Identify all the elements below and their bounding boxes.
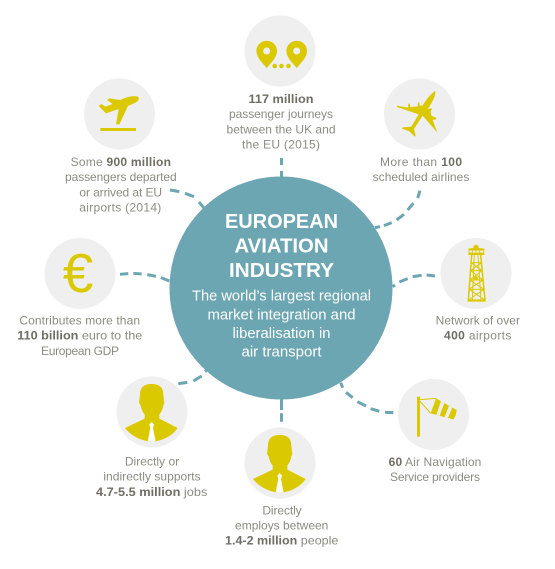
- connector: indirect jobs: [178, 369, 207, 384]
- label: Some 900 million: [71, 155, 171, 169]
- label: [17, 313, 143, 358]
- hub heading: INDUSTRY: [229, 259, 334, 282]
- label: [225, 503, 339, 547]
- connector: direct employment: [280, 398, 283, 422]
- label: 110 billion euro to the: [17, 328, 143, 342]
- hub heading: AVIATION: [234, 234, 328, 258]
- panel: air navigation: [389, 379, 481, 484]
- label: Contributes more than: [19, 313, 140, 327]
- hub description: liberalisation in: [232, 325, 330, 342]
- label: Network of over: [436, 313, 520, 327]
- label: airports (2014): [79, 201, 161, 215]
- hub heading: EUROPEAN: [225, 210, 338, 233]
- label: [389, 455, 481, 484]
- central hub circle: [170, 176, 392, 400]
- connector: GDP: [120, 273, 169, 281]
- label: Directly: [262, 503, 302, 517]
- label: [373, 155, 469, 184]
- label: [65, 155, 177, 215]
- icon: map pins: [256, 41, 307, 68]
- panel: passenger journeys: [226, 16, 336, 152]
- hub heading: [225, 210, 338, 282]
- hub description: [192, 288, 371, 361]
- label: 4.7-5.5 million jobs: [96, 485, 207, 499]
- connector: top: [280, 158, 283, 178]
- connector: air navigation: [341, 383, 393, 413]
- icon: control tower: [468, 245, 486, 302]
- label: passengers departed: [65, 170, 177, 184]
- panel: passengers: [65, 78, 177, 215]
- icon: person: [253, 435, 306, 492]
- connector: airlines: [375, 191, 420, 228]
- label: [226, 92, 336, 152]
- panel: direct employment: [225, 428, 339, 547]
- panel: GDP: [17, 238, 143, 358]
- label: [96, 455, 207, 499]
- connector: airports: [393, 275, 435, 287]
- label: More than 100: [380, 155, 462, 169]
- label: the EU (2015): [242, 138, 320, 152]
- label: employs between: [235, 518, 328, 532]
- icon: airplane: [397, 91, 437, 137]
- icon: euro: €: [63, 242, 93, 304]
- panel: airports: [436, 238, 520, 342]
- icon: person: [125, 384, 178, 441]
- label: or arrived at EU: [79, 186, 162, 200]
- label: 60 Air Navigation: [389, 455, 481, 469]
- hub description: market integration and: [208, 306, 356, 323]
- hub description: The world’s largest regional: [192, 288, 371, 305]
- panel: scheduled airlines: [373, 78, 469, 184]
- label: 400 airports: [444, 328, 511, 342]
- label: between the UK and: [226, 122, 336, 136]
- label: scheduled airlines: [373, 170, 469, 184]
- label: passenger journeys: [229, 107, 333, 121]
- label: [436, 313, 520, 342]
- label: 117 million: [248, 92, 314, 106]
- connector: passengers: [170, 190, 204, 208]
- icon: plane taking off: [99, 96, 139, 131]
- panel: indirect jobs: [96, 376, 207, 499]
- label: Directly or: [125, 455, 179, 469]
- label: 1.4-2 million people: [225, 533, 339, 547]
- icon: windsock: [417, 397, 457, 437]
- hub description: air transport: [242, 344, 322, 361]
- label: European GDP: [41, 344, 119, 358]
- label: indirectly supports: [103, 470, 201, 484]
- label: Service providers: [390, 470, 480, 484]
